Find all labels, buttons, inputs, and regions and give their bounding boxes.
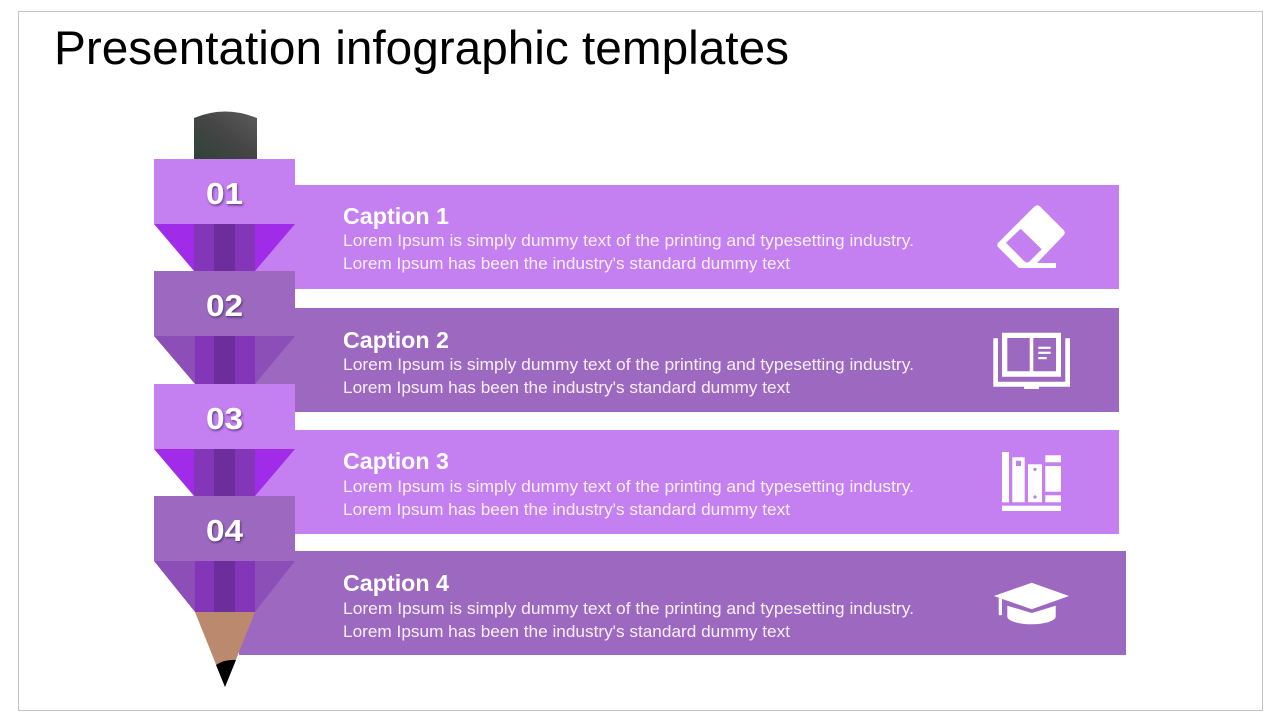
panel: caption 4: [239, 551, 1126, 655]
number 03: 03: [206, 401, 243, 436]
pencil wood tip: [195, 612, 255, 687]
text block: caption 4: Lorem Ipsum is simply dummy text of the printing and typesetting industry.: [343, 599, 914, 618]
pencil lead: [216, 660, 236, 687]
heading: caption 3: Caption 3: [343, 448, 449, 474]
text block: caption 4: [343, 599, 914, 641]
text block: caption 3: [343, 477, 914, 519]
icon: eraser: [997, 205, 1065, 268]
icon: open book: [993, 333, 1070, 389]
text block: caption 1: Lorem Ipsum has been the industry's standard dummy text: [343, 254, 790, 273]
icon: graduation cap: [994, 583, 1069, 624]
text block: caption 4: Lorem Ipsum has been the industry's standard dummy text: [343, 622, 790, 641]
heading: caption 4: Caption 4: [343, 570, 449, 596]
text block: caption 2: Lorem Ipsum has been the industry's standard dummy text: [343, 378, 790, 397]
pencil segment 4: [154, 496, 295, 612]
heading: caption 2: Caption 2: [343, 327, 449, 353]
panel: caption 2: [240, 308, 1119, 412]
title: Presentation infographic templates: [54, 21, 789, 74]
pencil segment 3: [154, 384, 295, 496]
heading: caption 1: Caption 1: [343, 203, 449, 229]
pencil: [154, 112, 295, 687]
pencil segment 1: [154, 159, 295, 271]
panel: caption 3: [240, 430, 1119, 534]
panel: caption 1: [240, 185, 1119, 289]
text block: caption 3: Lorem Ipsum is simply dummy text of the printing and typesetting industry.: [343, 477, 914, 496]
text block: caption 1: Lorem Ipsum is simply dummy text of the printing and typesetting industry.: [343, 231, 914, 250]
number 01: 01: [206, 176, 243, 211]
pencil segment 2: [154, 271, 295, 384]
text block: caption 3: Lorem Ipsum has been the industry's standard dummy text: [343, 500, 790, 519]
pencil eraser: [194, 112, 257, 159]
number 02: 02: [206, 288, 243, 323]
number 04: 04: [206, 513, 244, 548]
text block: caption 1: [343, 231, 914, 273]
text block: caption 2: [343, 355, 914, 397]
icon: books on shelf: [1002, 452, 1061, 511]
text block: caption 2: Lorem Ipsum is simply dummy text of the printing and typesetting industry.: [343, 355, 914, 374]
